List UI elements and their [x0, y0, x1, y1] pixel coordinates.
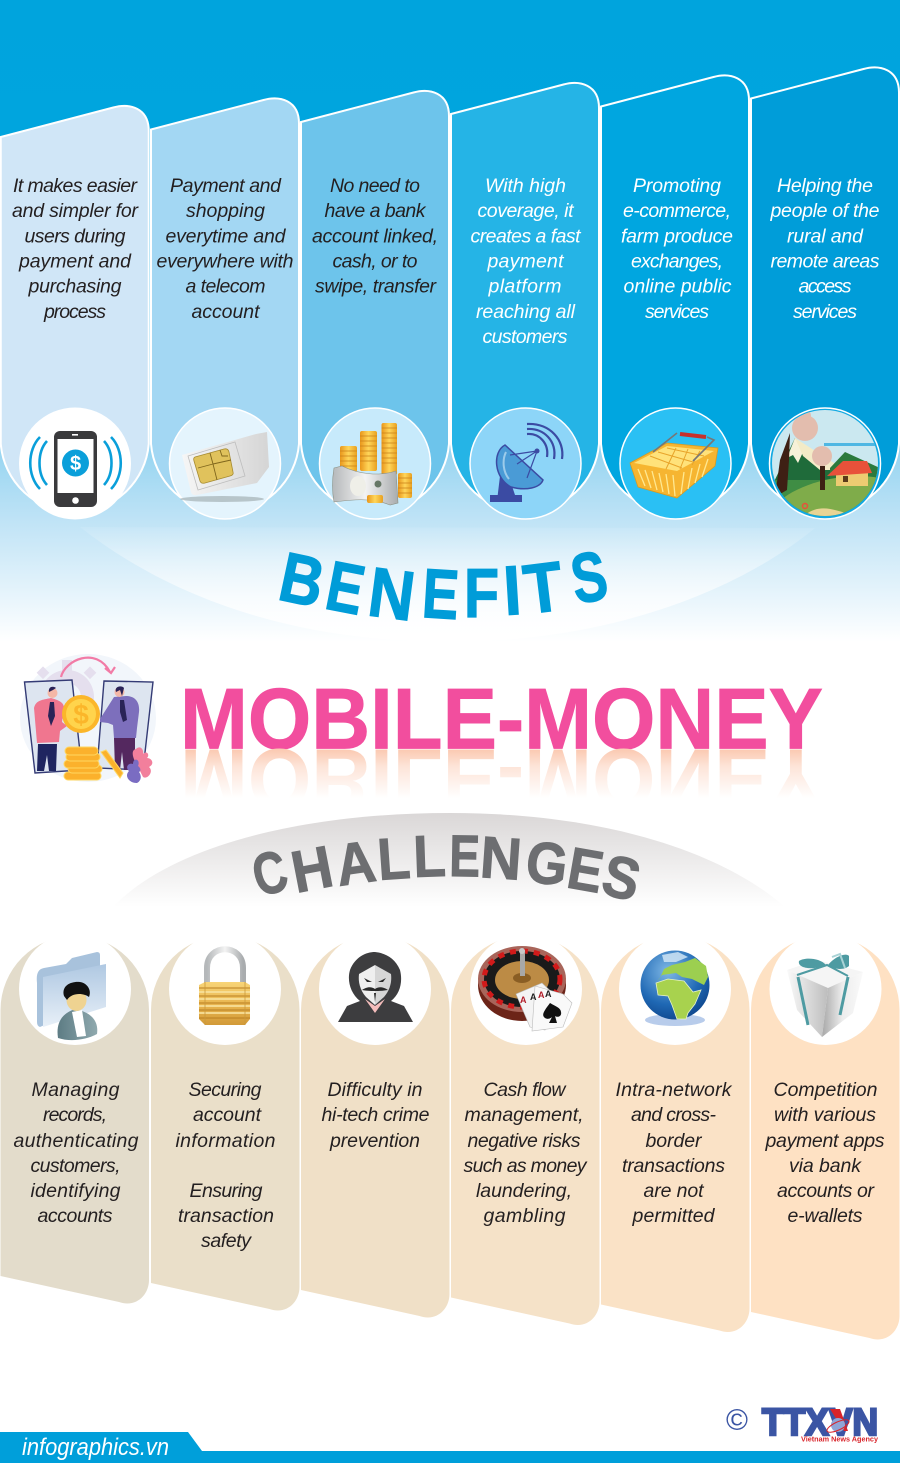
icon: smartphone payment: $ [70, 453, 81, 475]
text: challenge 5: Intra-network [616, 1079, 733, 1101]
text: benefit 4: payment [486, 250, 565, 272]
text: benefit 2: shopping [186, 200, 265, 222]
text: benefit 3: swipe, transfer [315, 276, 438, 298]
text: benefit 3: have a bank [324, 200, 427, 222]
text: benefit 6: people of the [770, 200, 880, 222]
text: benefit 5: e-commerce, [623, 200, 731, 222]
text: challenge 4 [464, 1079, 588, 1227]
icon: hooded anonymous hacker [319, 933, 431, 1045]
text: challenge 2: account [193, 1104, 263, 1126]
text: challenge 6: via bank [789, 1155, 862, 1177]
icon: roulette and playing cards: A [538, 990, 545, 1000]
heading: BENEFITS: T [519, 548, 567, 630]
coin: $ [73, 699, 89, 730]
text: benefit 6: remote areas [770, 250, 880, 272]
logo: TTXVN Vietnam News Agency: © [726, 1404, 748, 1437]
text: challenge 6 [764, 1079, 885, 1227]
panel: high coverage [451, 83, 599, 519]
text: challenge 1: accounts [38, 1205, 113, 1227]
text: challenge 3: prevention [329, 1130, 420, 1152]
text: benefit 4: creates a fast [470, 226, 582, 248]
text: challenge 4: negative risks [468, 1130, 581, 1152]
panel: cross-border [601, 933, 750, 1332]
text: challenge 2: information [176, 1130, 276, 1152]
tablet right [97, 681, 153, 770]
text: challenge 5: and cross- [631, 1104, 716, 1126]
text: challenge 1: records, [43, 1104, 107, 1126]
text: benefit 6: services [793, 301, 857, 323]
text: benefit 1: It makes easier [13, 175, 138, 197]
coin stack [64, 747, 123, 780]
logo: TTXVN Vietnam News Agency: Vietnam News Agency [801, 1434, 879, 1444]
icon: smartphone payment [19, 408, 131, 520]
text: challenge 1: Managing [32, 1079, 120, 1101]
panel: records [0, 933, 149, 1303]
text: benefit 6: access [798, 276, 852, 298]
title reflection: MOBILE-MONEY [180, 730, 823, 826]
text: challenge 2: Ensuring [190, 1180, 263, 1202]
text: challenge 6: with various [774, 1104, 876, 1126]
text: benefit 3: No need to [330, 175, 420, 197]
text: challenge 5: transactions [622, 1155, 725, 1177]
text: benefit 6: Helping the [777, 175, 873, 197]
icon: satellite dish [470, 408, 581, 519]
text: challenge 4: laundering, [476, 1180, 572, 1202]
text: benefit 3 [312, 175, 438, 298]
logo: TTXVN Vietnam News Agency: TTXVN [762, 1402, 878, 1444]
arrow [61, 658, 115, 677]
text: challenge 2: safety [201, 1230, 252, 1252]
text: challenge 6: payment apps [764, 1130, 885, 1152]
text: benefit 5: exchanges, [631, 250, 723, 272]
text: challenge 3 [322, 1079, 430, 1152]
text: challenge 5: border [646, 1130, 703, 1152]
text: benefit 5: services [645, 301, 709, 323]
panel: no bank account [301, 91, 449, 519]
text: benefit 2: a telecom [186, 276, 266, 298]
red V accent and globe [825, 1409, 851, 1435]
text: challenge 6: accounts or [777, 1180, 876, 1202]
heading: CHALLENGES: A [332, 829, 380, 899]
heading: CHALLENGES [245, 822, 647, 915]
person right [100, 686, 139, 770]
heading: BENEFITS: F [464, 554, 499, 632]
text: benefit 5 [621, 175, 733, 323]
title: MOBILE-MONEY: MOBILE-MONEY [180, 672, 823, 768]
icon: folder with person [19, 933, 131, 1045]
tablet left [24, 680, 82, 773]
text: challenge 4: gambling [484, 1205, 566, 1227]
heading: BENEFITS: B [273, 537, 331, 623]
text: challenge 1 [14, 1079, 139, 1227]
icon: roulette and playing cards: A [520, 995, 527, 1005]
panel: e-commerce [601, 75, 749, 519]
icon: shopping basket [620, 408, 731, 519]
illustration: two people exchanging money via phones [20, 654, 156, 783]
text: benefit 5: Promoting [633, 175, 721, 197]
text: benefit 4: coverage, it [478, 200, 575, 222]
heading: BENEFITS: S [565, 537, 613, 620]
heading: CHALLENGES: E [449, 824, 481, 890]
benefits arc backdrop [80, 527, 815, 642]
icon: roulette and playing cards [470, 933, 582, 1045]
text: benefit 4: reaching all [476, 301, 576, 323]
text: challenge 6: Competition [774, 1079, 878, 1101]
text: benefit 2: everytime and [166, 226, 287, 248]
text: challenge 5 [616, 1079, 733, 1227]
heading: CHALLENGES: N [478, 824, 524, 893]
text: challenge 6: e-wallets [788, 1205, 863, 1227]
panel: competition [751, 933, 900, 1339]
background gradient [0, 0, 900, 642]
text: benefit 4: customers [482, 326, 568, 348]
text: benefit 1: payment and [18, 250, 132, 272]
heading: BENEFITS [273, 537, 613, 637]
text: challenge 4: management, [464, 1104, 584, 1126]
text: benefit 1: purchasing [28, 276, 122, 298]
text: challenge 5: permitted [632, 1205, 716, 1227]
challenges panel row [0, 933, 900, 1339]
text: benefit 5: online public [624, 276, 732, 298]
benefits panel row [1, 67, 899, 525]
heading: BENEFITS: E [320, 547, 371, 630]
heading: CHALLENGES: E [563, 835, 608, 906]
icon: padlock [169, 933, 281, 1045]
text: benefit 2: account [192, 301, 261, 323]
challenges arc backdrop [113, 813, 785, 907]
footer bar with site tab [0, 1432, 900, 1463]
heading: CHALLENGES: L [375, 824, 412, 893]
icon: roulette and playing cards: A [545, 989, 552, 999]
heading: CHALLENGES: H [286, 834, 338, 906]
text: challenge 1: identifying [30, 1180, 121, 1202]
icon: globe [619, 933, 731, 1045]
icon: gold coins and banknotes [320, 408, 430, 519]
panel: shopping anywhere [151, 98, 299, 519]
panel: rural areas [751, 67, 899, 525]
text: benefit 1: process [43, 301, 106, 323]
plant [127, 747, 152, 783]
text: challenge 5: are not [644, 1180, 705, 1202]
text: challenge 3: hi-tech crime [322, 1104, 430, 1126]
person left [34, 687, 67, 771]
text: benefit 6 [770, 175, 880, 323]
heading: CHALLENGES: C [245, 838, 295, 910]
icon: SIM card [170, 408, 280, 519]
text: benefit 3: account linked, [312, 226, 438, 248]
heading: BENEFITS: E [420, 555, 461, 635]
icon: rural landscape [770, 408, 880, 525]
text: benefit 4 [470, 175, 582, 348]
text: challenge 2 [176, 1079, 276, 1252]
text: challenge 4: such as money [464, 1155, 588, 1177]
heading: BENEFITS: N [364, 554, 419, 637]
heading: CHALLENGES: S [596, 843, 647, 915]
text: benefit 5: farm produce [621, 226, 733, 248]
text: benefit 2: Payment and [170, 175, 282, 197]
panel: easier payment [1, 106, 149, 520]
heading: CHALLENGES: L [412, 822, 447, 890]
text: challenge 1: customers, [30, 1155, 120, 1177]
text: challenge 3: Difficulty in [328, 1079, 422, 1101]
text: challenge 2: Securing [188, 1079, 262, 1101]
icon: gift box [770, 933, 882, 1045]
icon: roulette and playing cards: A [530, 992, 537, 1002]
text: benefit 2: everywhere with [156, 250, 294, 272]
text: challenge 2: transaction [178, 1205, 274, 1227]
text: challenge 4: Cash flow [484, 1079, 567, 1101]
gear [35, 660, 96, 724]
text: benefit 1 [12, 175, 140, 323]
site name: infographics.vn [22, 1434, 169, 1461]
panel: account security [151, 933, 300, 1310]
panel: cash flow [451, 933, 600, 1325]
text: challenge 1: authenticating [14, 1130, 139, 1152]
text: benefit 6: rural and [787, 226, 864, 248]
heading: BENEFITS: I [501, 552, 523, 631]
heading: CHALLENGES: G [522, 828, 572, 899]
text: benefit 4: platform [488, 276, 562, 298]
text: benefit 2 [156, 175, 294, 323]
text: benefit 3: cash, or to [332, 250, 418, 272]
text: benefit 1: users during [24, 226, 126, 248]
panel: hi-tech crime [301, 933, 450, 1317]
text: benefit 4: With high [485, 175, 566, 197]
text: benefit 1: and simpler for [12, 200, 140, 222]
